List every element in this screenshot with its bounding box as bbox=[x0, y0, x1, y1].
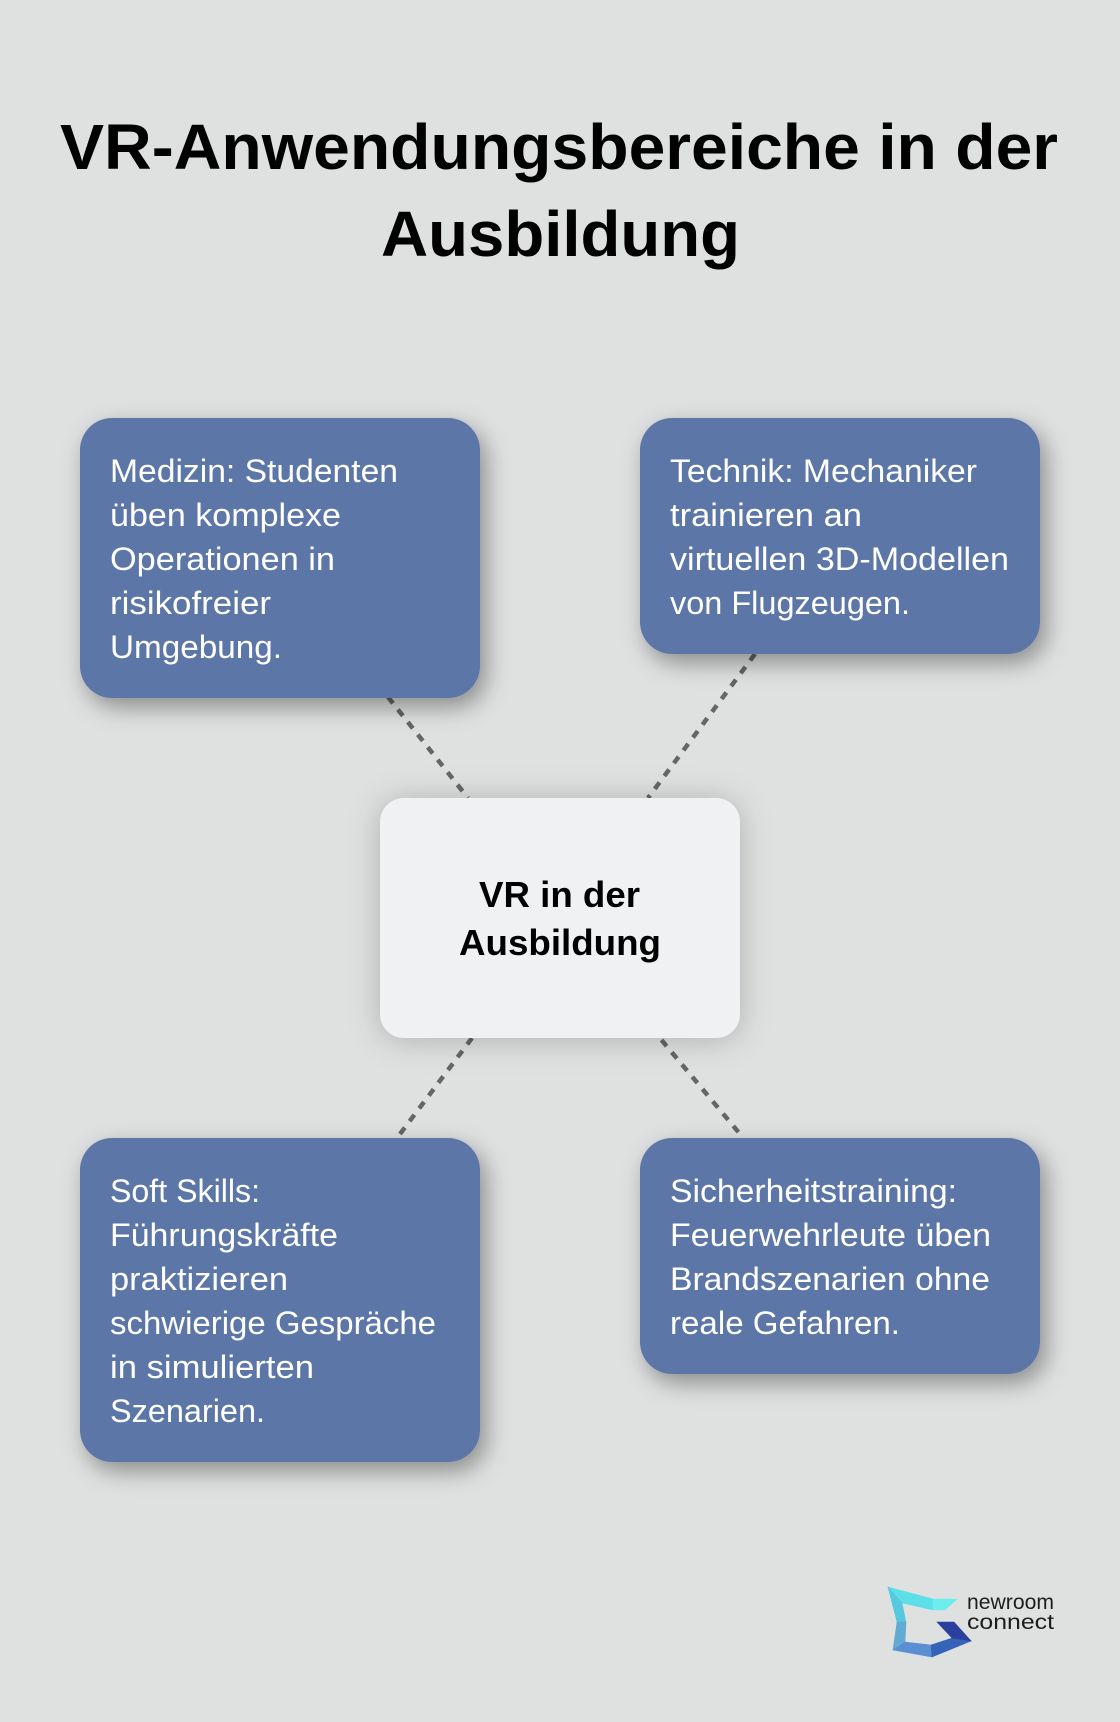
panel: Technik: Technik: Mechaniker bbox=[670, 453, 977, 489]
panel: Medizin: Operationen in bbox=[110, 541, 335, 577]
panel: Technik: trainieren an bbox=[670, 497, 862, 533]
panel: Medizin: Medizin: Studenten bbox=[110, 453, 398, 489]
panel: Soft Skills: Soft Skills: bbox=[110, 1173, 260, 1209]
connector: Technik to center bbox=[648, 654, 755, 798]
connector: Sicherheitstraining to center bbox=[662, 1040, 740, 1134]
title: Ausbildung bbox=[381, 198, 740, 270]
panel: Technik bbox=[640, 418, 1040, 654]
panel: Soft Skills: praktizieren bbox=[110, 1261, 288, 1297]
panel: Sicherheitstraining: Feuerwehrleute üben bbox=[670, 1217, 991, 1253]
panel: Sicherheitstraining: reale Gefahren. bbox=[670, 1305, 900, 1341]
logo: newroom connect: connect bbox=[967, 1611, 1054, 1634]
panel: center VR in der Ausbildung: VR in der bbox=[479, 874, 640, 915]
panel: center VR in der Ausbildung bbox=[380, 798, 740, 1038]
panel: Medizin bbox=[80, 418, 480, 698]
panel: Soft Skills bbox=[80, 1138, 480, 1462]
panel: Sicherheitstraining: Brandszenarien ohne bbox=[670, 1261, 990, 1297]
panel: Sicherheitstraining: Sicherheitstraining: bbox=[670, 1173, 957, 1209]
panel: Soft Skills: Szenarien. bbox=[110, 1393, 265, 1429]
panel: Medizin: Umgebung. bbox=[110, 629, 282, 665]
panel: Technik: virtuellen 3D-Modellen bbox=[670, 541, 1009, 577]
panel: Soft Skills: Führungskräfte bbox=[110, 1217, 338, 1253]
connector: Soft Skills to center bbox=[397, 1038, 472, 1138]
panel: Sicherheitstraining bbox=[640, 1138, 1040, 1374]
logo: newroom connect bbox=[888, 1587, 1054, 1657]
panel: Technik: von Flugzeugen. bbox=[670, 585, 910, 621]
panel: Medizin: üben komplexe bbox=[110, 497, 341, 533]
panel: Soft Skills: schwierige Gespräche bbox=[110, 1305, 436, 1341]
panel: Medizin: risikofreier bbox=[110, 585, 271, 621]
panel: center VR in der Ausbildung: Ausbildung bbox=[459, 922, 661, 963]
logo: newroom connect: newroom bbox=[967, 1591, 1054, 1614]
panel: Soft Skills: in simulierten bbox=[110, 1349, 314, 1385]
title bbox=[60, 111, 1058, 270]
connector: Medizin to center bbox=[388, 697, 468, 798]
title: VR-Anwendungsbereiche in der bbox=[60, 111, 1058, 183]
